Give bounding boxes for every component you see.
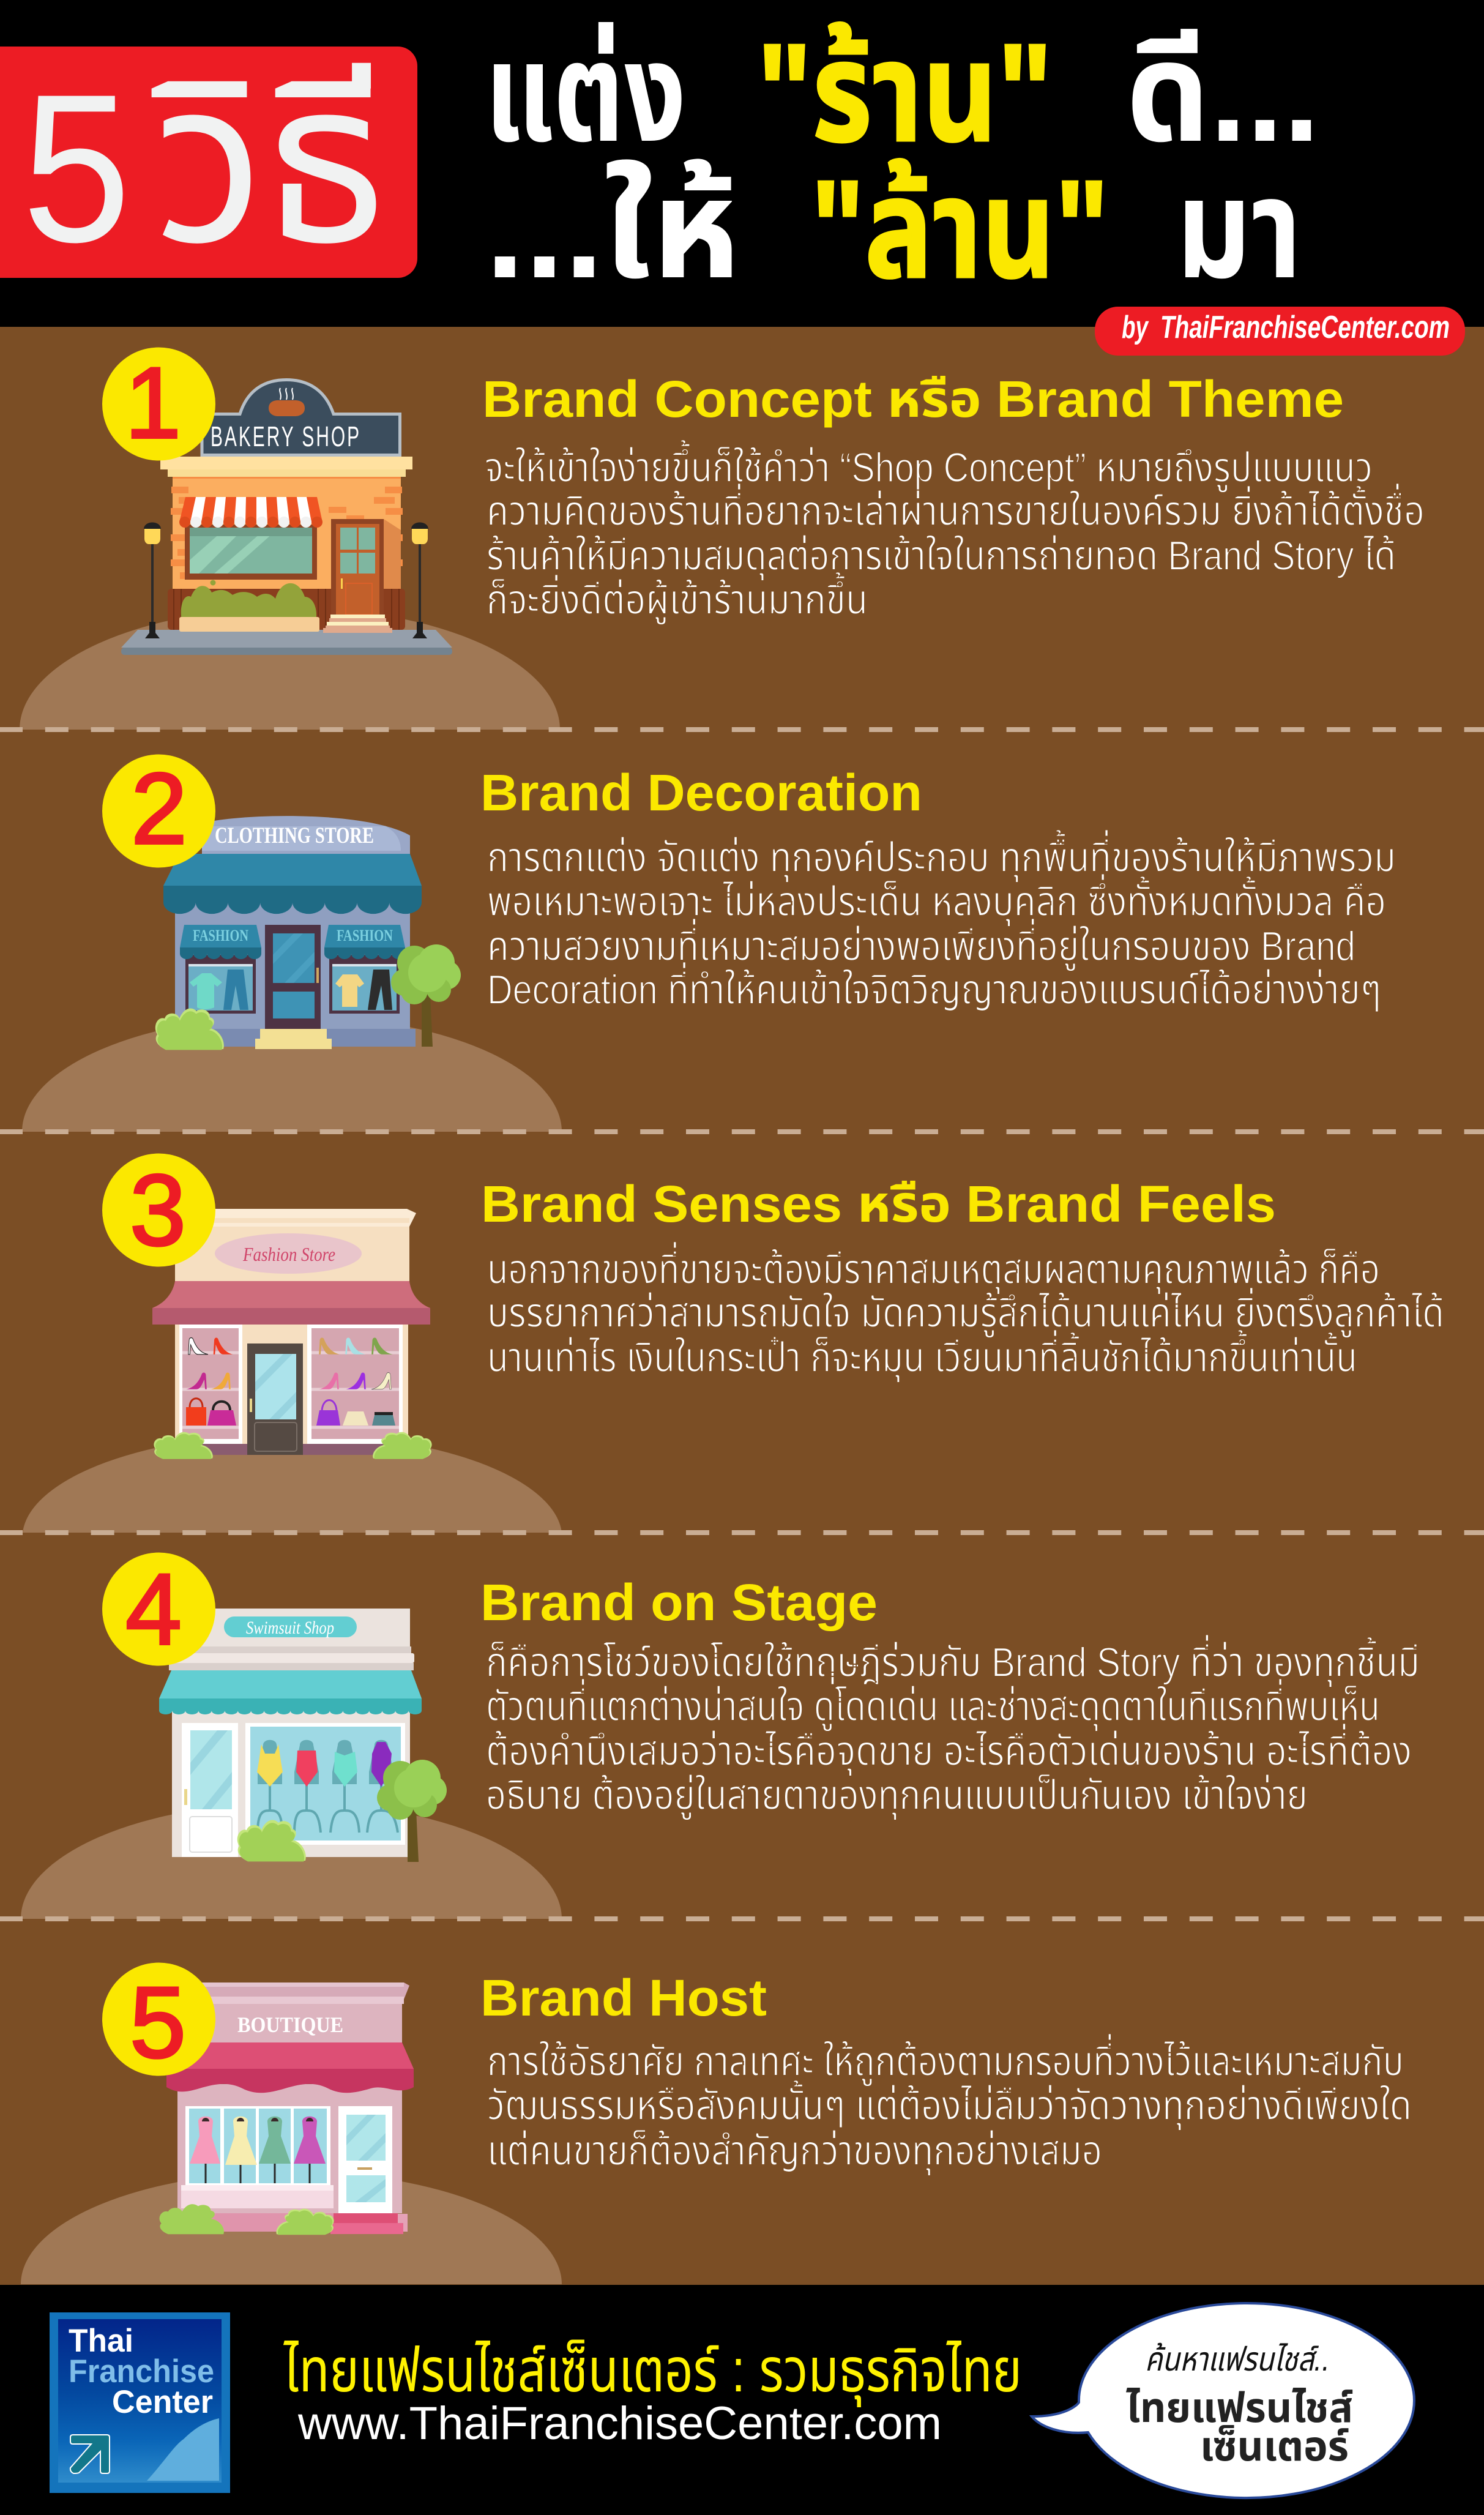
headline line 1: "ร้าน" xyxy=(757,15,1053,171)
number badge 4: 4 xyxy=(125,1553,182,1665)
footer website: www.ThaiFranchiseCenter.com xyxy=(297,2397,942,2450)
footer background xyxy=(0,2285,1484,2515)
number badge 1: 1 xyxy=(125,346,181,459)
text block 1 xyxy=(485,439,1425,625)
by-line badge: by xyxy=(1122,310,1149,345)
icon: swimsuit shop: Swimsuit Shop xyxy=(246,1618,334,1638)
icon: bakery shop xyxy=(121,379,452,655)
headline line 1: แต่ง xyxy=(485,15,686,171)
icon: boutique: BOUTIQUE xyxy=(237,2012,343,2037)
panel 5: Brand Host xyxy=(102,1962,1412,2235)
icon: clothing store: CLOTHING STORE xyxy=(215,823,374,848)
text block 5: แต่คนขายก็ต้องสำคัญกว่าของทุกอย่างเสมอ xyxy=(487,2128,1102,2176)
icon: swimsuit shop xyxy=(159,1609,447,1862)
red title box with 5 วิธี: วิธี xyxy=(151,37,387,290)
speech bubble: ไทยแฟรนไชส์ xyxy=(1126,2385,1353,2431)
icon: clothing store xyxy=(155,816,461,1050)
icon: bakery shop: BAKERY SHOP xyxy=(211,422,359,453)
heading 3: Brand Senses หรือ Brand Feels xyxy=(481,1175,1276,1233)
icon: fashion store xyxy=(152,1209,432,1459)
panel 1: Brand Concept xyxy=(102,346,1425,655)
number badge 1 xyxy=(102,346,215,460)
brown content area xyxy=(0,327,1484,2285)
speech bubble xyxy=(1032,2303,1414,2498)
panel 3: Brand Senses xyxy=(102,1153,1444,1459)
text block 2: ความสวยงามที่เหมาะสมอย่างพอเพียงที่อยู่ในกรอบของ Brand xyxy=(487,918,1355,971)
icon: clothing store: FASHION xyxy=(337,927,393,944)
icon: fashion store: Fashion Store xyxy=(242,1243,335,1265)
logo: Thai Franchise Center: Center xyxy=(112,2384,213,2420)
heading 2: Brand Decoration xyxy=(480,764,922,821)
number badge 4 xyxy=(102,1552,215,1666)
headline line 2: มา xyxy=(1176,152,1302,307)
number badge 5 xyxy=(102,1962,215,2079)
logo: Thai Franchise Center: Franchise xyxy=(69,2353,214,2390)
text block 4: อธิบาย ต้องอยู่ในสายตาของทุกคนแบบเป็นกันเอง เข้าใจง่าย xyxy=(486,1772,1308,1820)
heading 5: Brand Host xyxy=(480,1969,767,2027)
number badge 3 xyxy=(102,1153,215,1267)
hills and dividers xyxy=(0,608,1484,2284)
logo: Thai Franchise Center xyxy=(50,2312,230,2493)
headline line 2: ...ให้ xyxy=(485,152,740,307)
by-line badge xyxy=(1095,307,1465,356)
text block 2 xyxy=(487,829,1396,1013)
red title box with 5 วิธี xyxy=(0,37,417,290)
panel 2: Brand Decoration xyxy=(102,752,1396,1050)
number badge 3: 3 xyxy=(130,1154,186,1266)
text block 4 xyxy=(486,1634,1420,1820)
number badge 5: 5 xyxy=(130,1966,186,2079)
icon: boutique xyxy=(160,1982,414,2235)
text block 5 xyxy=(487,2033,1412,2176)
heading 4: Brand on Stage xyxy=(480,1574,878,1631)
headline line 1: ดี... xyxy=(1126,15,1320,171)
speech bubble: ค้นหาแฟรนไชส์.. xyxy=(1145,2341,1330,2378)
text block 1: ก็จะยิ่งดีต่อผู้เข้าร้านมากขึ้น xyxy=(487,572,868,625)
headline line 1 xyxy=(485,15,1320,171)
header xyxy=(0,15,1465,356)
panel 4: Brand on Stage xyxy=(102,1552,1420,1862)
footer Thai tagline: ไทยแฟรนไชส์เซ็นเตอร์ : รวมธุรกิจไทย xyxy=(283,2336,1022,2407)
heading 1: Brand Concept หรือ Brand Theme xyxy=(482,370,1344,428)
footer xyxy=(0,2285,1484,2515)
headline line 2 xyxy=(485,152,1302,307)
speech bubble: เซ็นเตอร์ xyxy=(1200,2423,1349,2470)
icon: clothing store: FASHION xyxy=(193,927,248,944)
headline line 2: "ล้าน" xyxy=(811,152,1109,307)
number badge 2 xyxy=(102,752,215,868)
text block 3 xyxy=(487,1241,1444,1383)
red title box with 5 วิธี: 5 xyxy=(22,51,131,286)
logo: Thai Franchise Center: Thai xyxy=(69,2323,133,2359)
number badge 2: 2 xyxy=(131,752,187,865)
